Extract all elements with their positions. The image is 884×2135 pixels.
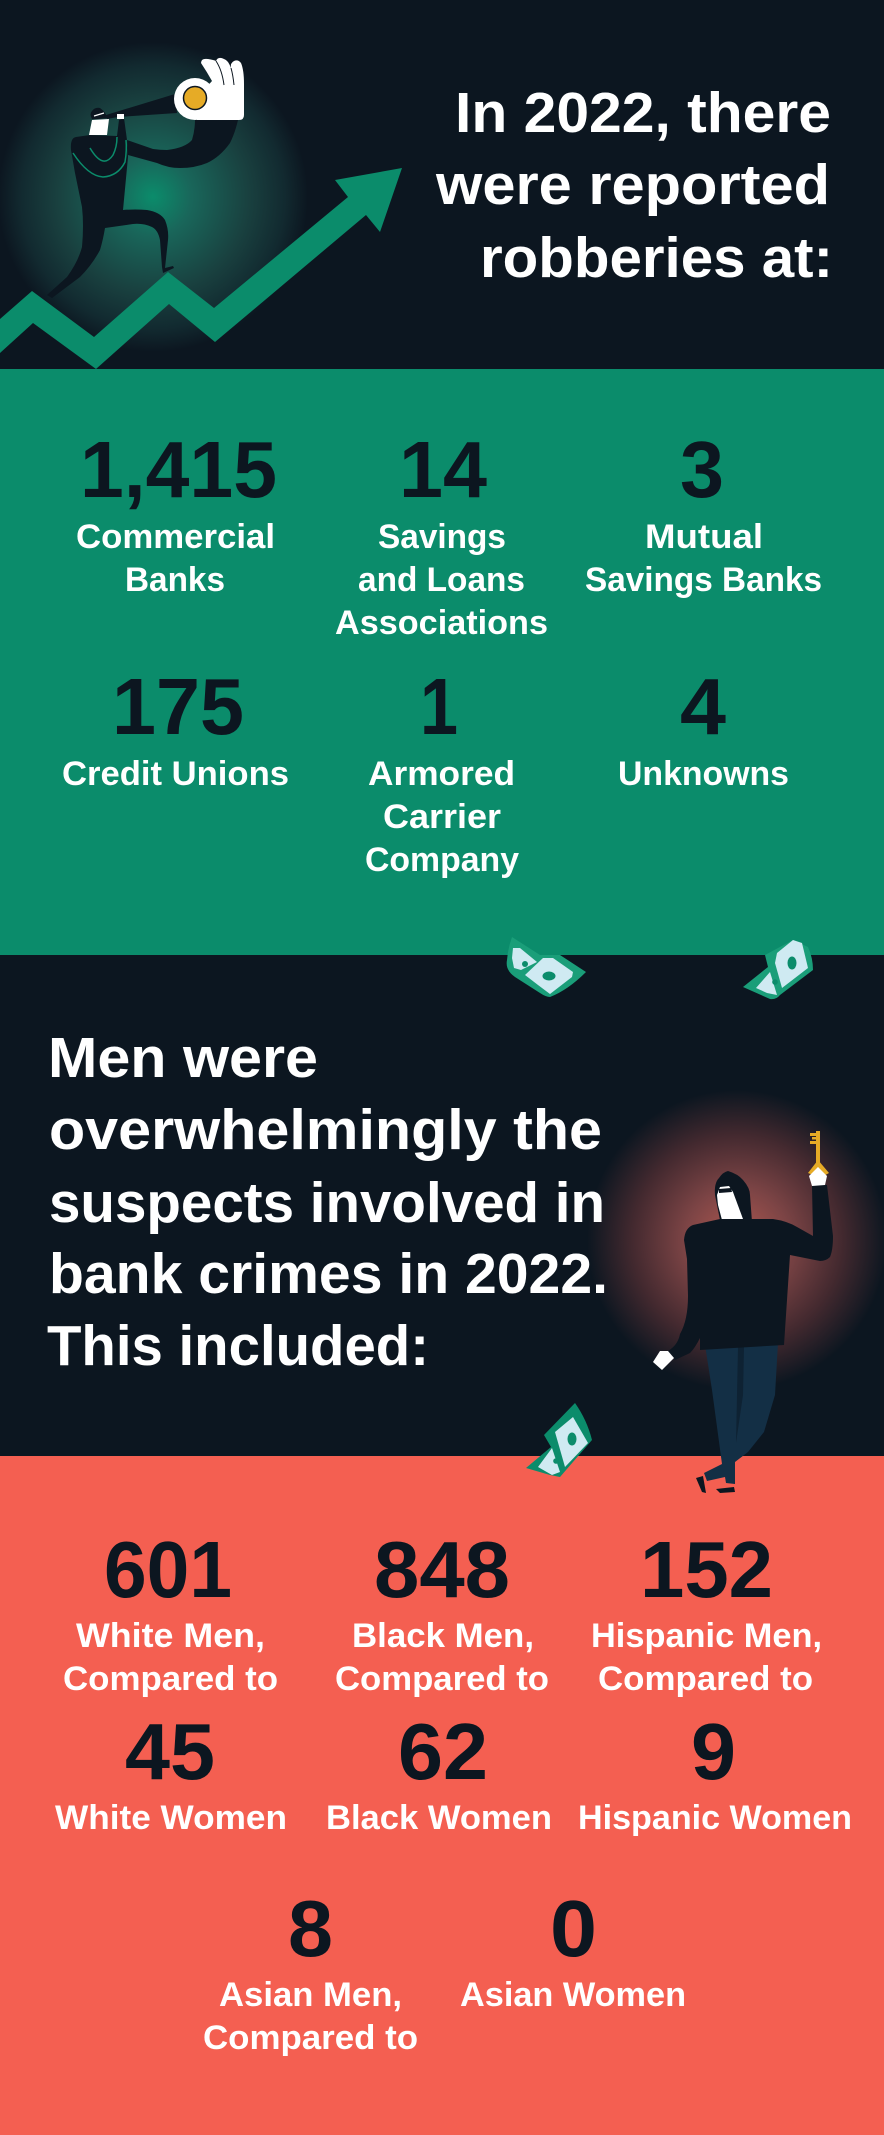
panel: header <box>0 0 884 369</box>
illustration: man with telescope <box>47 58 244 298</box>
stat: white men: White Men, <box>76 1617 265 1655</box>
stat: black men: 848 <box>374 1525 510 1614</box>
jacket straps <box>73 137 126 177</box>
stat: commercial banks <box>76 425 277 599</box>
stat: hispanic women: Hispanic Women <box>578 1799 852 1837</box>
icon: money bill left <box>507 937 586 997</box>
stat: armored carrier <box>365 662 519 879</box>
stat: commercial banks: Commercial <box>76 518 275 556</box>
stat: white women <box>55 1707 287 1837</box>
glow: green <box>0 42 308 352</box>
stat: black women: 62 <box>398 1707 488 1796</box>
icon: rising zigzag arrow <box>0 168 402 369</box>
stat: unknowns: Unknowns <box>618 755 789 793</box>
stat: hispanic men: Hispanic Men, <box>591 1617 822 1655</box>
stat: credit unions <box>62 662 289 793</box>
stat: unknowns: 4 <box>680 662 727 751</box>
stat: armored carrier: Armored <box>368 755 515 793</box>
glow: red <box>587 1090 884 1390</box>
panel: robbery counts <box>0 369 884 955</box>
stat: mutual savings banks <box>585 425 822 599</box>
stat: asian men: 8 <box>288 1884 333 1973</box>
stat: black women <box>326 1707 552 1837</box>
stat: black women: Black Women <box>326 1799 552 1837</box>
stat: savings and loans <box>335 425 548 642</box>
robber hand left <box>653 1351 674 1370</box>
stat: commercial banks: Banks <box>125 561 225 599</box>
robber mask <box>719 1188 732 1193</box>
illustration: hooded robber <box>653 1131 833 1493</box>
heading: overwhelmingly the <box>49 1098 602 1162</box>
heading: Men were <box>48 1026 318 1090</box>
stat: savings and loans: and Loans <box>358 561 525 599</box>
stat: white women: 45 <box>125 1707 215 1796</box>
stat: credit unions: 175 <box>112 662 244 751</box>
stat: savings and loans: 14 <box>399 425 488 514</box>
stat: white men: Compared to <box>63 1660 278 1698</box>
stat: hispanic women <box>578 1707 852 1837</box>
stat: savings and loans: Associations <box>335 604 548 642</box>
stat: mutual savings banks: Mutual <box>645 518 763 556</box>
stat: armored carrier: Carrier <box>383 798 501 836</box>
robber torso and arms <box>668 1185 833 1360</box>
stat: armored carrier: 1 <box>420 662 458 751</box>
stat: mutual savings banks: Savings Banks <box>585 561 822 599</box>
coin <box>184 86 206 110</box>
stat: hispanic men: 152 <box>640 1525 773 1614</box>
panel: suspect counts <box>0 1456 884 2135</box>
stat: savings and loans: Savings <box>378 518 506 556</box>
stat: hispanic women: 9 <box>691 1707 736 1796</box>
man neck <box>89 119 109 135</box>
stat: hispanic men <box>591 1525 822 1698</box>
key <box>808 1131 829 1178</box>
stat: asian men <box>203 1884 418 2057</box>
stat: white men: 601 <box>104 1525 232 1614</box>
stat: armored carrier: Company <box>365 841 519 879</box>
robber shoes <box>696 1476 735 1493</box>
stat: unknowns <box>618 662 789 793</box>
man body <box>47 118 174 298</box>
stat: asian men: Compared to <box>203 2019 418 2057</box>
shirt cuff <box>117 114 124 119</box>
heading: bank crimes in 2022. <box>49 1242 608 1306</box>
stat: credit unions: Credit Unions <box>62 755 289 793</box>
stat: asian men: Asian Men, <box>219 1976 402 2014</box>
stat: asian women: 0 <box>550 1884 597 1973</box>
robber trousers <box>704 1343 778 1484</box>
icon: money bill bottom <box>526 1403 592 1477</box>
man head <box>90 108 108 119</box>
stat: white women: White Women <box>55 1799 287 1837</box>
stat: black men: Black Men, <box>352 1617 534 1655</box>
stat: black men <box>335 1525 549 1698</box>
trouser gap <box>736 1347 744 1443</box>
glasses <box>94 113 104 116</box>
stat: asian women <box>460 1884 686 2014</box>
title: were reported <box>435 153 830 217</box>
heading: suspects involved in <box>49 1171 605 1235</box>
stat: hispanic men: Compared to <box>598 1660 813 1698</box>
heading: This included: <box>47 1314 429 1378</box>
telescope <box>106 94 177 119</box>
heading <box>47 1026 608 1378</box>
stat: asian women: Asian Women <box>460 1976 686 2014</box>
robber hood <box>715 1171 752 1222</box>
stat: black men: Compared to <box>335 1660 549 1698</box>
title: robberies at: <box>480 226 833 290</box>
robber face <box>717 1186 743 1220</box>
stat: white men <box>63 1525 278 1698</box>
panel: suspects intro <box>0 955 884 1456</box>
icon: money bill right <box>743 940 813 999</box>
hand holding coin <box>174 58 244 120</box>
man arm <box>127 120 238 168</box>
robber hand right <box>809 1167 827 1186</box>
stat: commercial banks: 1,415 <box>80 425 277 514</box>
stat: mutual savings banks: 3 <box>680 425 724 514</box>
title: In 2022, there <box>455 81 831 145</box>
title <box>435 81 833 290</box>
